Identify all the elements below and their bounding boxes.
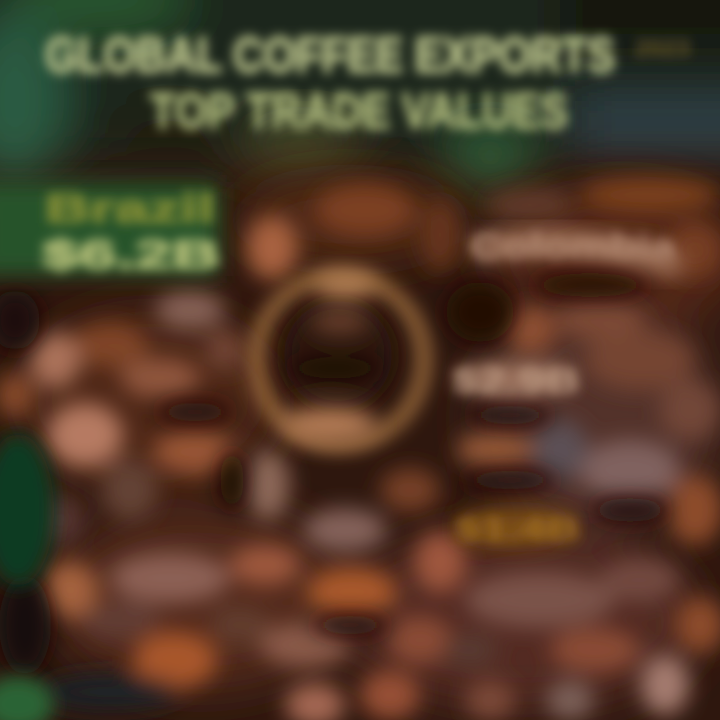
gold callout xyxy=(455,509,580,547)
donut chart ring xyxy=(256,273,424,444)
leaf: bottom left xyxy=(0,676,54,720)
coffee beans field xyxy=(0,177,720,720)
middle callout: $2.9B xyxy=(452,362,580,400)
title: 2023 xyxy=(635,35,690,62)
dark gaps between beans xyxy=(0,273,668,675)
header band xyxy=(0,0,720,186)
ring centre xyxy=(284,301,392,409)
leaf: left xyxy=(0,434,54,586)
coffee beans base layer xyxy=(20,180,720,710)
label text: $6.2B xyxy=(42,233,220,277)
green leaves xyxy=(0,434,54,720)
label background xyxy=(0,182,220,276)
title xyxy=(45,27,690,139)
label text: Brazil xyxy=(45,187,215,231)
ring highlights xyxy=(282,273,383,443)
curved callout label xyxy=(470,228,680,268)
ring xyxy=(256,276,424,444)
title: TOP TRADE VALUES xyxy=(150,83,568,139)
title: GLOBAL COFFEE EXPORTS xyxy=(45,27,615,83)
gold callout: $1.4B xyxy=(455,511,580,547)
callout text: Colombia xyxy=(470,228,676,266)
panel: green label xyxy=(0,182,220,277)
label text xyxy=(42,187,220,277)
